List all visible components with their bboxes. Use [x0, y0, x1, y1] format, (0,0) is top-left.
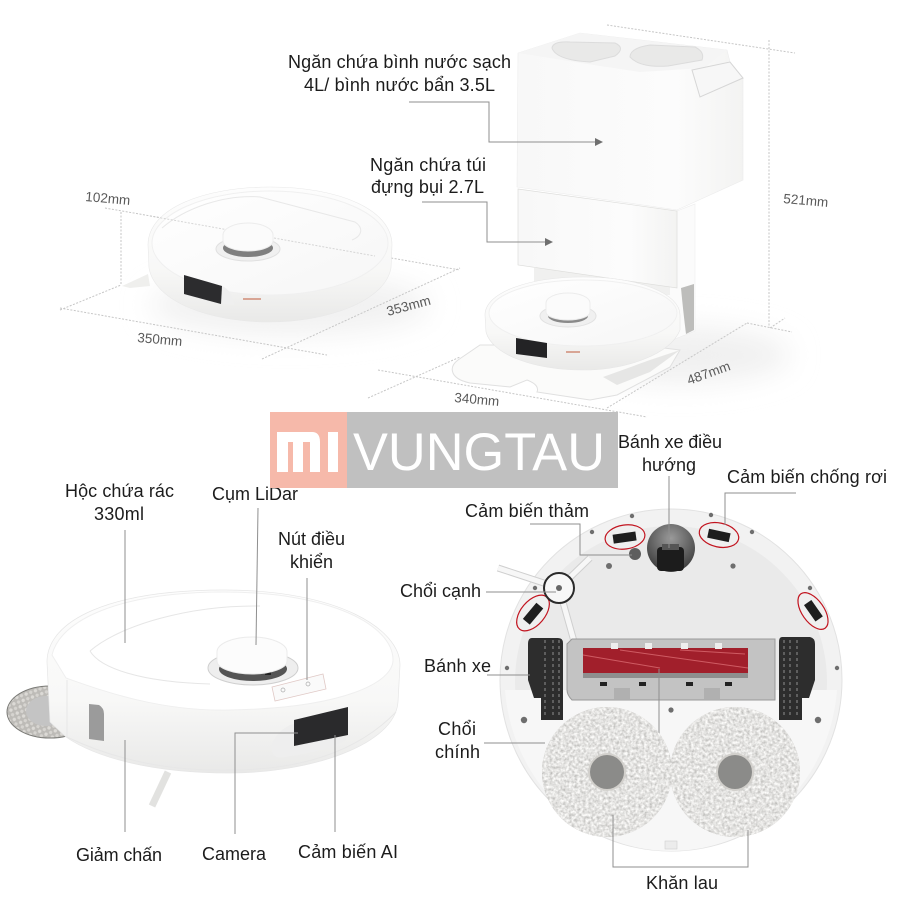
handle — [692, 62, 743, 97]
sensor recess — [272, 712, 346, 758]
robot top — [489, 280, 677, 346]
tank lid left — [552, 42, 620, 62]
label: dust bag compartment: Ngăn chứa túi — [370, 155, 486, 175]
arrow: water tank — [409, 102, 603, 146]
control buttons — [272, 674, 326, 701]
label: caster wheel: hướng — [642, 455, 696, 475]
panel: robot top view — [7, 590, 400, 806]
bumper side slot — [89, 704, 104, 741]
leader: camera — [235, 733, 298, 834]
overhead dimension line — [150, 216, 375, 256]
inner plate — [515, 526, 827, 838]
robot body — [47, 590, 400, 773]
left wheel — [528, 638, 563, 720]
leader: lidar — [256, 508, 258, 645]
logo mark — [243, 298, 261, 300]
leader: side brush — [486, 591, 556, 593]
label: wheel: Bánh xe — [424, 656, 491, 676]
leader: carpet sensor — [530, 524, 632, 555]
watermark — [270, 412, 618, 488]
cliff sensor front left — [604, 522, 646, 552]
label: caster wheel — [618, 432, 722, 475]
watermark mi logo — [277, 432, 338, 472]
outer shell — [500, 509, 842, 851]
label: caster wheel: Bánh xe điều — [618, 432, 722, 452]
label: main brush — [435, 719, 480, 762]
floor shadow — [150, 275, 430, 335]
label: dust bag compartment — [370, 155, 486, 197]
rear tab — [665, 841, 677, 849]
leader: cliff sensor — [725, 493, 796, 525]
dimension: 353mm: 353mm — [385, 293, 432, 319]
label: bumper: Giảm chấn — [76, 845, 162, 865]
panel: robot underside — [498, 509, 842, 851]
panel: robot dimensions — [60, 187, 460, 359]
leader: caster wheel — [668, 476, 670, 548]
bumper — [67, 680, 396, 770]
lid panel — [162, 197, 361, 240]
cliff sensor left — [510, 589, 556, 637]
label: dust bag compartment: đựng bụi 2.7L — [371, 177, 484, 197]
watermark text: VUNGTAU — [353, 423, 605, 482]
right wheel — [779, 637, 815, 720]
cliff sensor front right — [697, 519, 741, 551]
label: lidar: Cụm LiDar — [212, 484, 298, 504]
cliff sensor right — [792, 587, 834, 635]
mop pad right — [670, 707, 800, 837]
label: main brush: Chổi — [438, 719, 476, 739]
panel: base station — [368, 25, 795, 417]
dimension: 521mm: 521mm — [783, 191, 829, 210]
dimension guide lines — [368, 25, 795, 417]
mat ramp — [603, 350, 680, 385]
leader: main brush — [484, 742, 545, 744]
label: control buttons — [278, 529, 345, 572]
mat — [452, 345, 680, 400]
watermark background — [270, 412, 618, 488]
side brush — [152, 772, 168, 806]
robot top — [152, 191, 388, 295]
front window — [184, 275, 222, 304]
main brush housing — [567, 639, 775, 740]
front glow — [222, 286, 234, 305]
dimension: 350mm: 350mm — [137, 330, 183, 349]
column side — [681, 284, 694, 334]
label: mop pads: Khăn lau — [646, 873, 718, 893]
mop edge — [7, 686, 93, 738]
caster wheel — [647, 524, 695, 572]
lidar — [216, 223, 280, 261]
leader: dustbin — [124, 530, 126, 643]
front window — [516, 338, 547, 358]
leader: control buttons — [306, 578, 308, 680]
front window — [294, 707, 348, 746]
brush tip — [122, 274, 150, 288]
leader: bumper — [124, 740, 126, 832]
logo mark — [566, 351, 580, 353]
label: dustbin: Hộc chứa rác — [65, 481, 174, 501]
robot top — [52, 592, 393, 710]
label: water tank compartment: 4L/ bình nước bẩn 3.5L — [304, 75, 495, 95]
lidar — [208, 637, 298, 685]
dimension guide lines — [60, 208, 460, 359]
label: dustbin: 330ml — [94, 504, 144, 524]
arrow: dust bag — [422, 202, 553, 246]
label: camera: Camera — [202, 844, 267, 864]
dust compartment — [518, 189, 677, 288]
side brush — [498, 558, 590, 652]
screws — [505, 513, 839, 723]
label: dustbin — [65, 481, 174, 524]
label: water tank compartment: Ngăn chứa bình nước sạch — [288, 52, 511, 72]
dimension: 102mm: 102mm — [85, 189, 131, 208]
tank lid right — [630, 45, 703, 66]
label: AI sensor: Cảm biến AI — [298, 842, 398, 862]
leader: wheel — [487, 674, 530, 676]
label: control buttons: Nút điều — [278, 529, 345, 549]
lower plate — [505, 690, 837, 851]
tank top face — [518, 33, 727, 72]
dimension: 487mm: 487mm — [685, 358, 732, 388]
rear column — [660, 204, 695, 345]
label: control buttons: khiển — [290, 552, 333, 572]
base shadow — [570, 327, 790, 383]
water tank — [517, 33, 743, 210]
label: main brush: chính — [435, 742, 480, 762]
leader: mop pads — [613, 815, 748, 867]
label: water tank compartment — [288, 52, 511, 95]
label: cliff sensor: Cảm biến chống rơi — [727, 467, 887, 487]
label: side brush: Chổi cạnh — [400, 581, 481, 601]
robot body — [148, 187, 392, 322]
dustbin lid — [90, 606, 260, 684]
label: carpet sensor: Cảm biến thảm — [465, 501, 589, 521]
back wall — [534, 268, 670, 295]
lidar — [540, 293, 596, 327]
mop pad left — [542, 707, 672, 837]
carpet sensor — [629, 548, 641, 560]
robot body — [485, 277, 680, 370]
dimension: 340mm: 340mm — [454, 390, 500, 409]
leader: AI sensor — [334, 735, 336, 832]
